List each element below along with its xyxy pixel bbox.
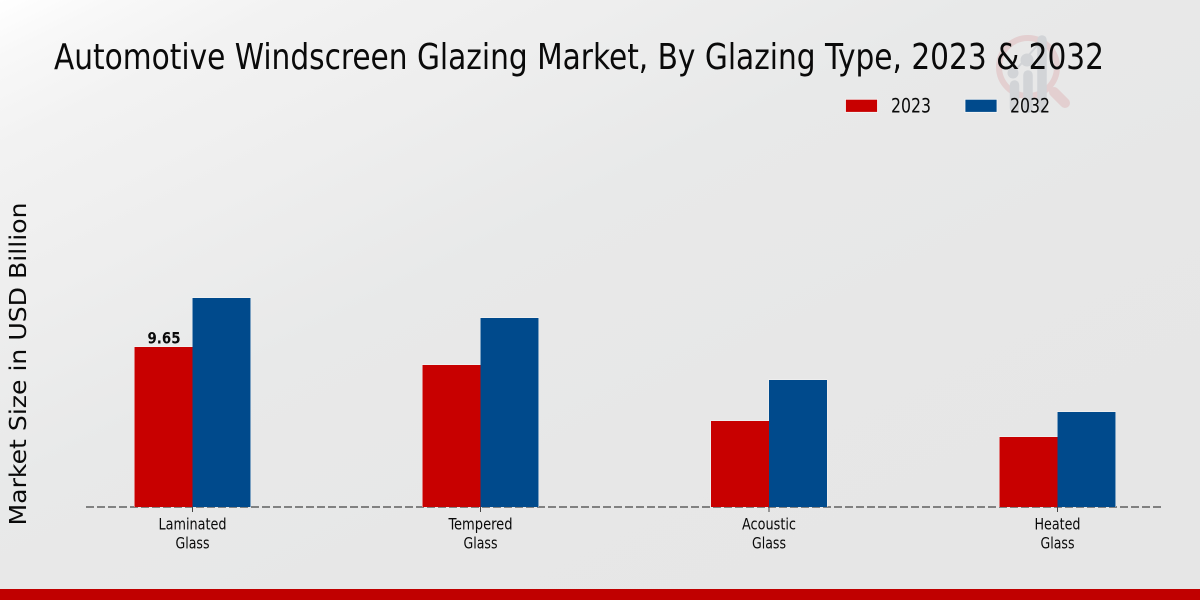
group: Laminated Glass xyxy=(134,298,250,507)
x axis labels xyxy=(158,507,1080,552)
legend: 2032 xyxy=(965,94,1050,118)
label: Acoustic Glass: Acoustic xyxy=(742,514,796,533)
title: Automotive Windscreen Glazing Market, By Glazing Type, 2023 & 2032 xyxy=(54,37,1104,78)
legend: 2023: 2023 xyxy=(891,94,931,118)
label: Heated Glass: Heated xyxy=(1034,514,1080,533)
label: Tempered Glass: Glass xyxy=(464,533,498,552)
legend: 2023 xyxy=(846,94,931,118)
value label: 9.65 xyxy=(148,328,180,347)
label: Laminated Glass: Glass xyxy=(176,533,210,552)
label: Heated Glass xyxy=(1034,514,1080,552)
label: Laminated Glass: Laminated xyxy=(158,514,226,533)
label: Laminated Glass xyxy=(158,514,226,552)
x axis baseline xyxy=(86,506,1164,508)
group: Acoustic Glass xyxy=(711,380,827,507)
label: Tempered Glass: Tempered xyxy=(448,514,512,533)
footer bar xyxy=(0,589,1200,600)
label: Acoustic Glass xyxy=(742,514,796,552)
label: Tempered Glass xyxy=(448,514,512,552)
group: Tempered Glass xyxy=(422,318,538,507)
y axis label: Market Size in USD Billion xyxy=(6,202,32,526)
label: Heated Glass: Glass xyxy=(1040,533,1074,552)
bar chart xyxy=(134,298,1116,507)
group: Heated Glass xyxy=(1000,412,1116,507)
legend xyxy=(846,94,1050,118)
watermark logo xyxy=(999,38,1065,108)
legend: 2032: 2032 xyxy=(1010,94,1050,118)
label: Acoustic Glass: Glass xyxy=(752,533,786,552)
